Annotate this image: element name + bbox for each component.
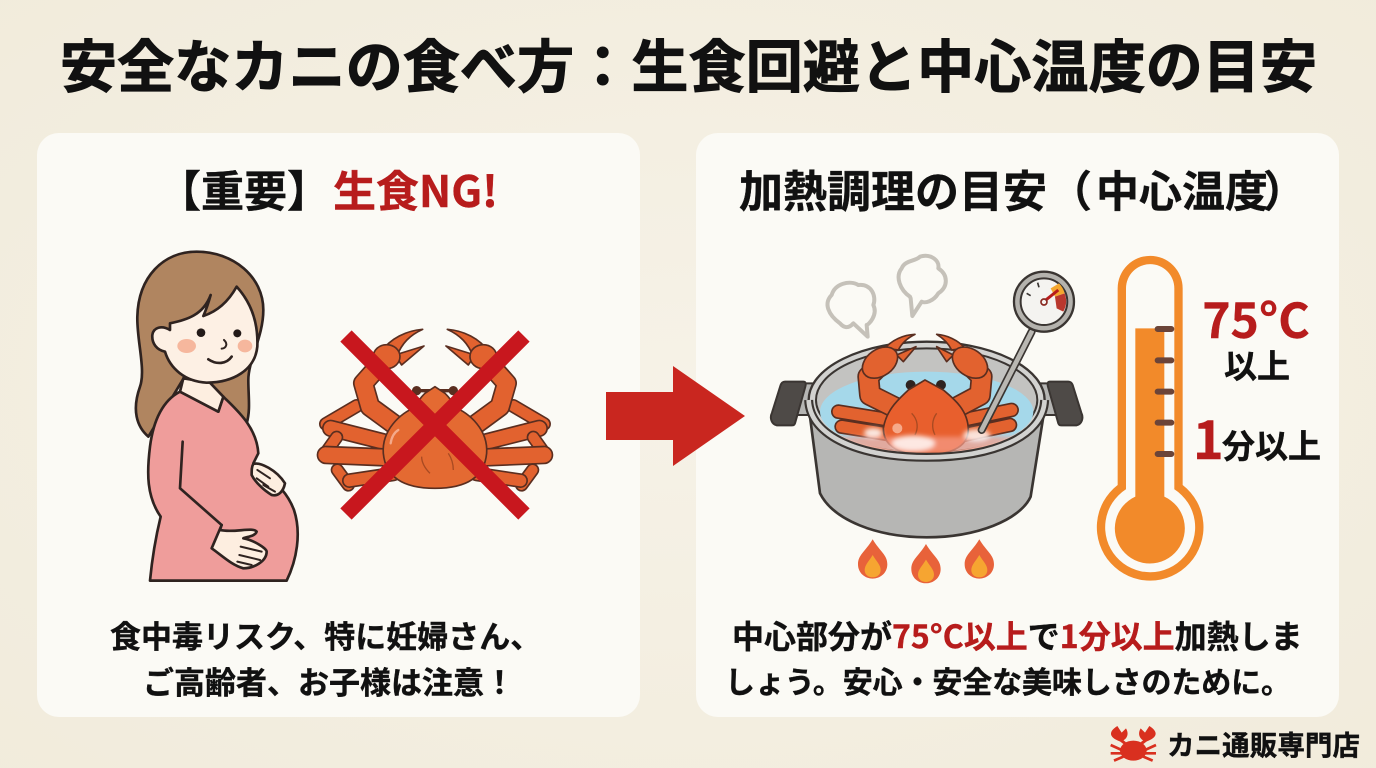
cooking guidance text <box>725 612 1303 702</box>
icon: crab crossed out <box>325 329 545 514</box>
heading: cooking guide: 中心温度 <box>1096 158 1268 220</box>
probe thermometer <box>982 272 1074 430</box>
heading: raw NG: 生食NG! <box>333 158 498 220</box>
warning text: 食中毒リスク、特に妊婦さん、 <box>110 612 541 657</box>
pot handles <box>771 382 1082 425</box>
red X mark <box>346 336 524 514</box>
brand name: カニ通販専門店 <box>1167 723 1360 763</box>
label: 1 minute or more: 1 <box>1193 399 1224 474</box>
cooking guidance text: しょう。安心・安全な美味しさのために。 <box>725 658 1291 702</box>
label: 1 minute or more: 分以上 <box>1222 420 1321 468</box>
heading: cooking guide: 加熱調理の目安 <box>739 156 1047 220</box>
panel: cooking guide <box>696 133 1339 717</box>
heading: cooking guide: （ <box>1049 158 1092 220</box>
foam <box>837 428 1017 453</box>
title: 安全なカニの食べ方：生食回避と中心温度の目安 <box>60 22 1317 104</box>
crab in pot <box>838 334 1012 455</box>
label: 75°C or higher: 75°C <box>1202 282 1310 352</box>
steam clouds <box>828 256 946 337</box>
heading: cooking guide: ） <box>1263 158 1306 220</box>
burner flames <box>858 539 994 583</box>
icon: small crab <box>1111 726 1156 761</box>
pot rim back <box>809 342 1045 458</box>
boiling water <box>820 372 1033 452</box>
warning text: ご高齢者、お子様は注意！ <box>143 658 515 703</box>
pot body <box>810 417 1043 537</box>
label: 1 minute or more <box>1193 399 1321 474</box>
label: 75°C or higher <box>1202 282 1310 388</box>
cooking guidance text: 中心部分が75°C以上で1分以上加熱しま <box>732 612 1303 658</box>
panel background <box>37 133 640 717</box>
panel: raw food warning <box>37 133 640 717</box>
heading: raw NG: 【重要】 <box>158 158 330 220</box>
icon: boiling crab pot <box>771 256 1082 583</box>
pot rim front <box>809 400 1045 457</box>
label: 75°C or higher: 以上 <box>1224 340 1290 388</box>
panel background <box>696 133 1339 717</box>
brand logo <box>1111 723 1360 763</box>
icon: pregnant woman <box>136 252 298 581</box>
arrow <box>606 366 745 466</box>
raw crab <box>325 329 545 488</box>
icon: thermometer <box>1097 256 1203 581</box>
